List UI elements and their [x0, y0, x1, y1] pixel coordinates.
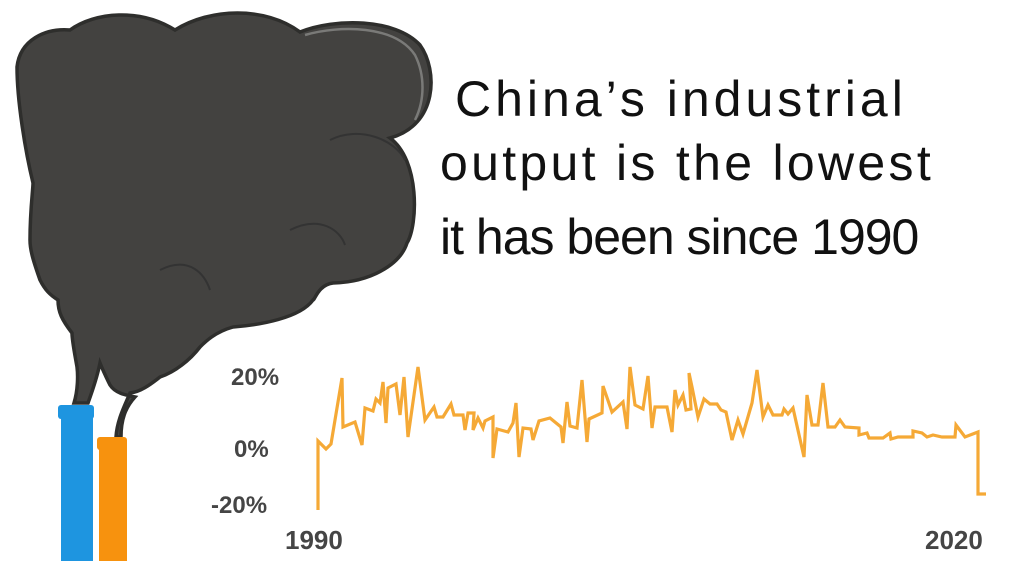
title	[440, 71, 934, 265]
icon: orange smokestack	[97, 437, 127, 561]
axis label: -20%: -20%	[211, 492, 267, 519]
axis label: 20%: 20%	[231, 364, 279, 391]
title: it has been since 1990	[440, 209, 918, 265]
axis label: 0%: 0%	[234, 436, 269, 463]
title: China’s industrial	[455, 71, 907, 127]
axis label: 2020: 2020	[925, 525, 983, 555]
axis label: 1990: 1990	[285, 525, 343, 555]
icon: blue smokestack	[58, 405, 94, 561]
line chart	[318, 367, 986, 510]
title: output is the lowest	[440, 135, 934, 191]
icon: smoke cloud	[17, 13, 431, 437]
